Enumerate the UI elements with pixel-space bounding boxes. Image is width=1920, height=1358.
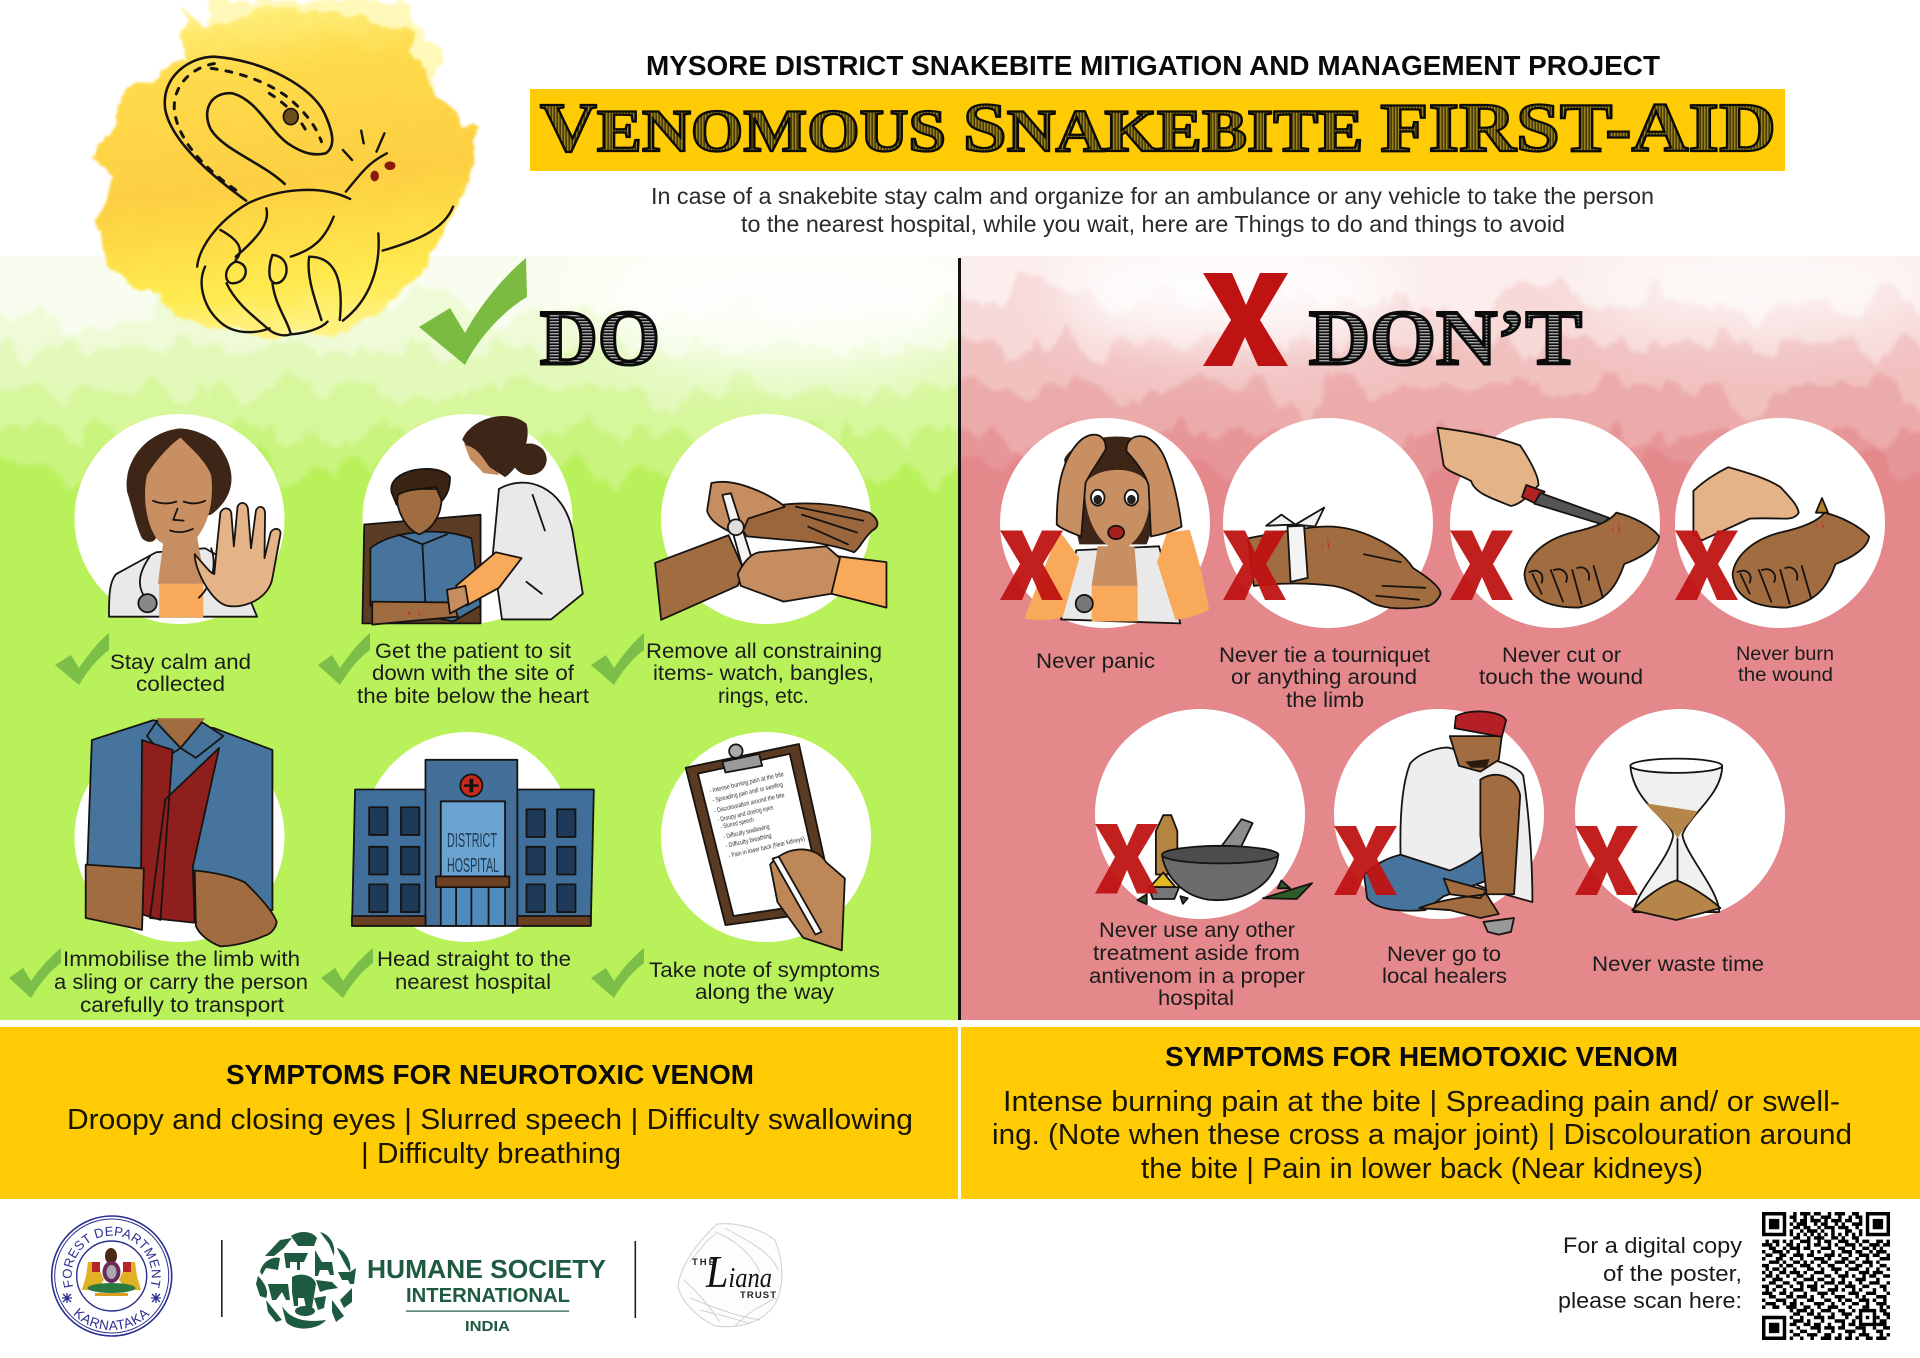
do captions: Immobilise the limb with bbox=[63, 948, 300, 971]
list on clipboard: - Difficulty breathing bbox=[725, 832, 773, 850]
panel: hemotoxic symptoms: the bite | Pain in lower back (Near kidneys) bbox=[1141, 1153, 1703, 1185]
heading: do bbox=[419, 258, 660, 381]
do captions: a sling or carry the person bbox=[54, 971, 308, 994]
dont captions: the wound bbox=[1738, 665, 1833, 686]
item: stay calm bbox=[74, 414, 284, 624]
item: burn bbox=[1675, 418, 1885, 628]
do captions: nearest hospital bbox=[395, 971, 551, 994]
item: never panic bbox=[1000, 418, 1210, 628]
do captions: Remove all constraining bbox=[646, 640, 882, 663]
do captions: down with the site of bbox=[372, 662, 574, 685]
do captions: along the way bbox=[695, 981, 835, 1004]
heading: dont: DON’T bbox=[1309, 294, 1582, 381]
dont captions: hospital bbox=[1158, 987, 1234, 1010]
panel: hemotoxic symptoms: SYMPTOMS FOR HEMOTOXIC VENOM bbox=[1165, 1041, 1678, 1072]
item: local healers bbox=[1334, 709, 1544, 935]
intro text: to the nearest hospital, while you wait, here are Things to do and things to avoid bbox=[741, 211, 1565, 237]
label: hospital sign: DISTRICT bbox=[447, 830, 497, 852]
heading: dont bbox=[1203, 273, 1582, 381]
logo: humane society international india bbox=[256, 1232, 606, 1335]
label: hospital sign: HOSPITAL bbox=[447, 855, 499, 877]
subtitle: project name: MYSORE DISTRICT SNAKEBITE MITIGATION AND MANAGEMENT PROJECT bbox=[646, 50, 1660, 81]
list on clipboard: - Slurred speech bbox=[720, 816, 755, 831]
dont captions: treatment aside from bbox=[1093, 942, 1300, 965]
qr caption bbox=[1558, 1233, 1742, 1313]
dont captions: Never waste time bbox=[1592, 953, 1764, 976]
item: other treatment bbox=[1095, 709, 1312, 919]
panel: dont items bbox=[1000, 418, 1885, 1010]
logo: the liana trust: TRUST bbox=[740, 1290, 776, 1301]
do captions: carefully to transport bbox=[80, 994, 284, 1017]
qr caption: For a digital copy bbox=[1563, 1233, 1742, 1258]
qr caption: please scan here: bbox=[1558, 1288, 1742, 1313]
do captions: the bite below the heart bbox=[357, 685, 589, 708]
icon: yellow watercolour splash bbox=[89, 0, 475, 333]
panel: do background bbox=[0, 256, 958, 1020]
logo: the liana trust: THE bbox=[692, 1257, 715, 1268]
panel: dont background bbox=[961, 256, 1920, 1020]
dont captions: local healers bbox=[1382, 965, 1507, 988]
item: immobilise bbox=[74, 718, 284, 946]
dont captions: the limb bbox=[1286, 689, 1364, 712]
do captions: Get the patient to sit bbox=[375, 640, 571, 663]
panel: hemotoxic symptoms: ing. (Note when these cross a major joint) | Discolouration around bbox=[992, 1119, 1852, 1151]
do captions: Head straight to the bbox=[377, 948, 571, 971]
divider bbox=[634, 1241, 636, 1318]
logo: the liana trust: Liana bbox=[705, 1246, 772, 1297]
intro text: In case of a snakebite stay calm and organize for an ambulance or any vehicle to take the person bbox=[651, 183, 1654, 209]
dont captions: Never panic bbox=[1036, 650, 1155, 673]
item: sit patient bbox=[362, 414, 583, 625]
dont captions bbox=[1036, 644, 1834, 1010]
icon: animal globe bbox=[256, 1232, 356, 1329]
dont captions: or anything around bbox=[1231, 666, 1417, 689]
dont captions: Never cut or bbox=[1502, 644, 1621, 667]
item: note symptoms bbox=[661, 732, 871, 950]
list on clipboard: - Intense burning pain at the bite bbox=[709, 771, 785, 795]
panel: hemotoxic symptoms: Intense burning pain at the bite | Spreading pain and/ or swell- bbox=[1003, 1086, 1840, 1118]
icon: large X bbox=[1203, 273, 1288, 366]
logo: the liana trust bbox=[678, 1224, 782, 1327]
list on clipboard: - Difficulty swallowing bbox=[723, 824, 770, 841]
logo: forest department karnataka: FOREST DEPARTMENT bbox=[62, 1226, 161, 1288]
dont captions: Never burn bbox=[1736, 644, 1834, 665]
logo: humane society international india: INDIA bbox=[465, 1318, 510, 1335]
list on clipboard: - Droopy and closing eyes bbox=[717, 804, 775, 824]
do captions bbox=[54, 640, 882, 1017]
logo: humane society international india: INTERNATIONAL bbox=[406, 1285, 570, 1307]
illustration: snake biting hand bbox=[165, 57, 453, 335]
divider bbox=[958, 258, 961, 1020]
item: remove items bbox=[655, 414, 886, 624]
dont captions: Never use any other bbox=[1099, 919, 1295, 942]
item: waste time bbox=[1575, 709, 1785, 920]
qr code bbox=[1762, 1212, 1890, 1340]
x icons bbox=[1000, 530, 1738, 895]
logo: forest department karnataka bbox=[50, 1215, 172, 1337]
icon: large check mark bbox=[419, 258, 527, 365]
do captions: items- watch, bangles, bbox=[653, 662, 874, 685]
dont captions: touch the wound bbox=[1479, 666, 1643, 689]
logo: humane society international india: HUMANE SOCIETY bbox=[367, 1254, 606, 1284]
item: cut bbox=[1438, 418, 1660, 628]
item: tourniquet bbox=[1223, 418, 1441, 628]
dont captions: Never tie a tourniquet bbox=[1219, 644, 1430, 667]
list on clipboard: - Discolouration around the bite bbox=[713, 792, 785, 815]
do captions: collected bbox=[136, 673, 225, 696]
panel: neurotoxic symptoms: SYMPTOMS FOR NEUROTOXIC VENOM bbox=[226, 1059, 754, 1090]
panel: do items bbox=[9, 414, 886, 1017]
heading: do: DO bbox=[540, 294, 660, 381]
check icons bbox=[9, 633, 644, 998]
dont captions: Never go to bbox=[1387, 943, 1501, 966]
qr caption: of the poster, bbox=[1603, 1261, 1742, 1286]
panel: neurotoxic symptoms bbox=[0, 1027, 958, 1199]
dont captions: antivenom in a proper bbox=[1089, 965, 1305, 988]
do captions: Take note of symptoms bbox=[649, 959, 880, 982]
panel: neurotoxic symptoms: | Difficulty breathing bbox=[361, 1138, 621, 1170]
list on clipboard bbox=[709, 771, 805, 860]
panel: hemotoxic symptoms bbox=[961, 1027, 1920, 1199]
do captions: Stay calm and bbox=[110, 651, 251, 674]
list on clipboard: - Spreading pain and/ or swelling bbox=[712, 781, 784, 804]
panel: neurotoxic symptoms: Droopy and closing eyes | Slurred speech | Difficulty swallowing bbox=[67, 1104, 913, 1136]
logo: forest department karnataka: KARNATAKA bbox=[74, 1308, 150, 1330]
divider bbox=[221, 1240, 223, 1317]
list on clipboard: - Pain in lower back (Near kidneys) bbox=[728, 836, 805, 860]
item: hospital bbox=[352, 732, 594, 942]
title banner: VENOMOUS SNAKEBITE FIRST-AID bbox=[540, 90, 1776, 167]
intro text bbox=[651, 183, 1654, 237]
label: hospital sign bbox=[447, 830, 499, 877]
do captions: rings, etc. bbox=[718, 685, 809, 708]
